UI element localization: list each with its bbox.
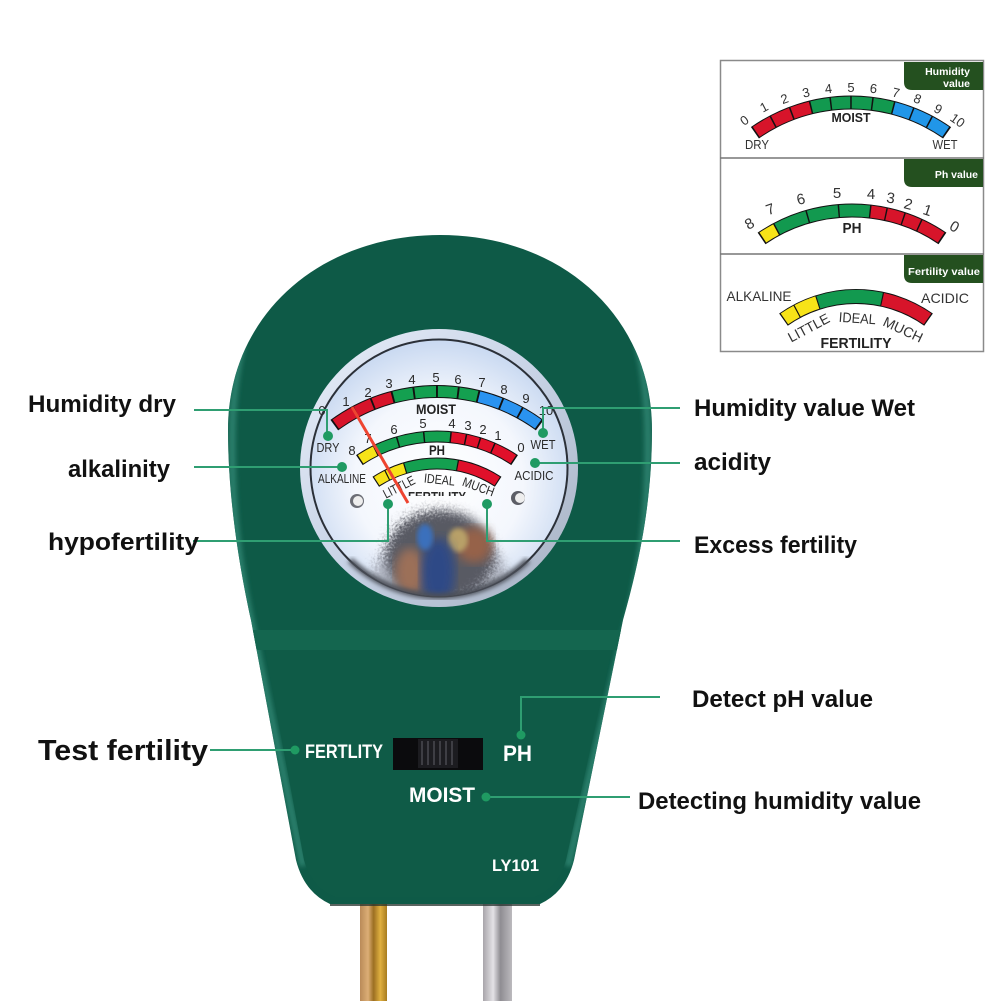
moist label: MOIST	[416, 401, 456, 417]
callout: humidity wet: Humidity value Wet	[694, 395, 915, 422]
inset: ph	[629, 148, 1001, 594]
ph value numbers: 4	[867, 186, 875, 203]
humidity labels: WET	[932, 137, 958, 152]
humidity labels	[745, 110, 958, 152]
fertility value labels: LITTLE	[785, 310, 832, 345]
humidity numbers: 8	[912, 90, 924, 107]
callout: test fertility	[38, 735, 300, 767]
dial words: DRY	[316, 440, 340, 455]
ph numbers: 0	[517, 440, 525, 455]
switch label fertility: FERTLITY	[305, 742, 383, 763]
fertility scale	[283, 421, 591, 729]
dial	[300, 329, 578, 607]
meter body	[228, 235, 652, 905]
humidity numbers: 9	[931, 101, 945, 117]
humidity numbers: 7	[891, 84, 901, 101]
humidity numbers	[737, 80, 968, 131]
humidity numbers: 5	[847, 80, 855, 95]
callout: humidity dry	[28, 391, 333, 441]
screw left	[350, 494, 364, 508]
ph value label: PH	[842, 220, 862, 237]
dial reflection	[372, 510, 508, 624]
humidity tab: Humidity	[925, 66, 970, 78]
callout: hypofertility: hypofertility	[48, 529, 200, 556]
ph value numbers	[742, 185, 962, 237]
humidity labels: MOIST	[832, 110, 871, 125]
callout: detecting humidity: Detecting humidity value	[638, 788, 921, 815]
dial words: LITTLE	[380, 472, 418, 501]
humidity tab: value	[943, 78, 970, 90]
fertility value labels: FERTILITY	[820, 335, 892, 352]
ph value numbers: 0	[946, 218, 962, 237]
ph value numbers: 5	[833, 185, 841, 202]
humidity numbers: 2	[778, 90, 790, 107]
moist numbers: 9	[522, 391, 530, 406]
ph tab	[904, 159, 983, 187]
moist numbers: 5	[432, 370, 440, 385]
callout: detecting humidity	[482, 788, 921, 815]
inset legend panel	[618, 37, 1001, 597]
ph label: PH	[429, 442, 445, 458]
moist numbers: 6	[454, 372, 462, 387]
dial words: FERTILITY	[408, 489, 466, 504]
needle	[352, 407, 408, 503]
inset: fertility	[681, 247, 1001, 597]
callout: humidity dry: Humidity dry	[28, 391, 177, 418]
humidity numbers: 6	[869, 81, 878, 96]
ph value numbers: 3	[885, 190, 896, 208]
moist numbers: 7	[478, 375, 486, 390]
ph value numbers: 7	[764, 200, 777, 219]
dial words: ALKALINE	[318, 471, 366, 486]
dial lower rim shadow	[350, 560, 528, 596]
switch	[393, 738, 483, 770]
ph value scale	[629, 148, 1001, 594]
callout: detect ph	[516, 686, 873, 740]
moist numbers: 2	[364, 385, 372, 400]
probe: gold	[360, 900, 387, 1001]
ph value numbers: 8	[742, 215, 758, 234]
fertility tab	[904, 255, 983, 283]
fertility value labels	[726, 288, 969, 352]
callout: test fertility: Test fertility	[38, 735, 208, 767]
dial words: MUCH	[460, 474, 497, 499]
ph numbers: 7	[364, 431, 372, 446]
moist numbers: 10	[539, 403, 553, 418]
band	[240, 630, 640, 650]
fertility value scale	[681, 247, 1001, 597]
ph numbers: 8	[348, 443, 356, 458]
moist numbers: 4	[408, 372, 416, 387]
probe: silver	[483, 900, 512, 1001]
ph tab: Ph value	[935, 169, 978, 181]
humidity numbers: 3	[801, 84, 811, 101]
switch label moist: MOIST	[409, 784, 475, 807]
moist numbers: 1	[342, 394, 350, 409]
ph value numbers: 2	[902, 195, 914, 214]
inset: humidity	[618, 37, 1001, 503]
ph scale	[243, 382, 631, 770]
callout: humidity wet	[538, 395, 915, 438]
callout: alkalinity	[68, 456, 347, 483]
dial words	[317, 440, 556, 498]
switch label ph: PH	[503, 741, 532, 766]
ph numbers	[348, 416, 525, 458]
fertility tab: Fertility value	[908, 266, 980, 278]
callout: hypofertility	[48, 499, 393, 556]
humidity numbers: 10	[947, 110, 968, 131]
dial face	[312, 340, 566, 596]
callout: excess fertility	[482, 499, 858, 559]
lower panel	[265, 650, 612, 897]
moist numbers: 8	[500, 382, 508, 397]
dial rim	[300, 329, 578, 607]
fertility value labels: ALKALINE	[726, 288, 792, 304]
humidity tab	[904, 62, 983, 90]
moist scale	[194, 322, 680, 808]
callout: alkalinity: alkalinity	[68, 456, 171, 483]
moist numbers: 0	[318, 403, 326, 418]
dial words: ACIDIC	[514, 468, 554, 483]
fertility value labels: MUCH	[881, 313, 926, 346]
ph numbers: 5	[419, 416, 427, 431]
fertility value labels: ACIDIC	[921, 290, 969, 306]
ph value numbers: 1	[921, 201, 934, 220]
screw right	[511, 491, 525, 505]
callout: acidity: acidity	[694, 449, 772, 476]
humidity numbers: 4	[824, 81, 833, 96]
moist numbers	[318, 370, 553, 418]
callout: excess fertility: Excess fertility	[694, 532, 858, 559]
humidity labels: DRY	[745, 137, 769, 152]
callout: acidity	[530, 449, 772, 476]
ph numbers: 3	[464, 418, 472, 433]
model number: LY101	[492, 856, 539, 875]
ph numbers: 6	[390, 422, 398, 437]
humidity numbers: 0	[737, 112, 752, 129]
ph numbers: 2	[479, 422, 487, 437]
ph numbers: 1	[494, 428, 502, 443]
humidity numbers: 1	[757, 99, 771, 115]
callout: detect ph: Detect pH value	[692, 686, 873, 713]
moist numbers: 3	[385, 376, 393, 391]
dial words: IDEAL	[423, 470, 456, 489]
ph numbers: 4	[448, 416, 456, 431]
ph value numbers: 6	[795, 190, 807, 209]
humidity scale	[618, 37, 1001, 503]
fertility value labels: IDEAL	[838, 309, 877, 327]
dial words: WET	[530, 437, 556, 452]
